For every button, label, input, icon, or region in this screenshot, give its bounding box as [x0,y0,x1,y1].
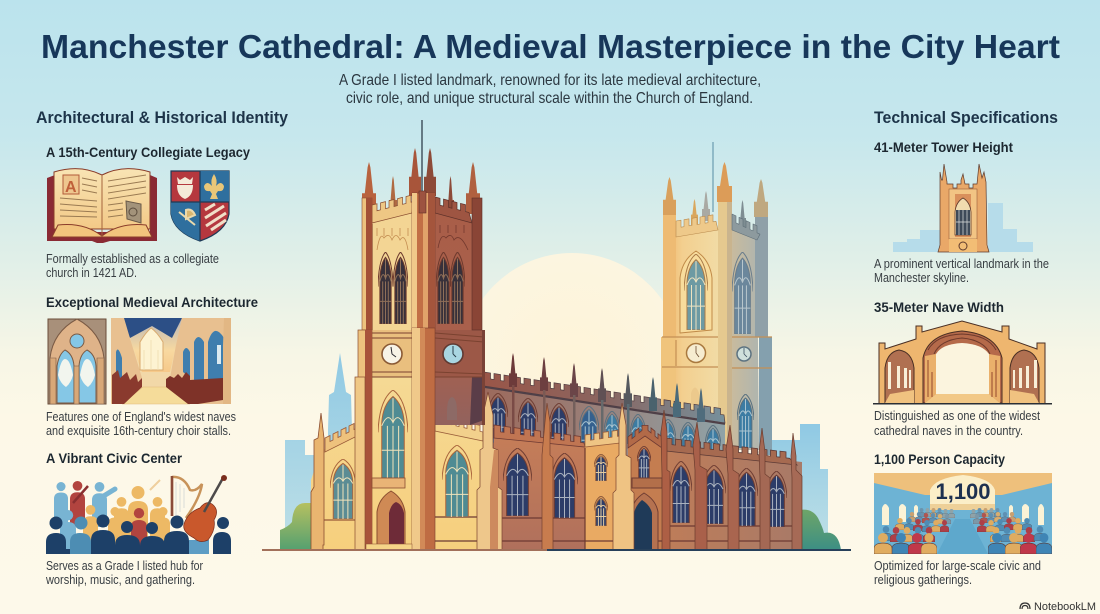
heading: 41-Meter Tower Height [874,139,1013,155]
choir stalls [112,370,142,404]
tree left [280,503,316,550]
stripes [205,204,226,230]
title: Manchester Cathedral: A Medieval Masterpiece in the City Heart [41,28,1060,65]
subtitle: A Grade I listed landmark, renowned for its late medieval architecture, [339,72,761,89]
panel: medieval architecture [46,294,258,438]
violin [184,503,217,542]
panel: collegiate legacy [46,144,250,280]
tree right [800,510,841,550]
heading: A Vibrant Civic Center [46,450,183,466]
caption: Optimized for large-scale civic and [874,559,1041,573]
aisle buttresses [477,392,502,550]
crown [177,177,193,199]
porch door [631,493,658,550]
right tower clock side [737,347,751,361]
belfry window left [378,252,393,324]
ground line [262,549,851,551]
right section heading: Technical Specifications [874,109,1058,127]
caption: church in 1421 AD. [46,266,137,280]
city skyline right [772,424,828,545]
city skyline left [285,353,352,550]
subtitle [339,72,761,107]
heading: 1,100 Person Capacity [874,451,1005,467]
icon: coat of arms shield [171,171,229,241]
icon: gothic window tracery [48,319,106,404]
crowd right [970,508,1052,554]
caption [874,257,1049,285]
side aisle left [885,350,914,403]
porch inscription [632,478,662,488]
caption: worship, music, and gathering. [45,573,195,587]
caption: Manchester skyline. [874,271,969,285]
belfry window right [436,252,451,324]
main tower [355,120,485,550]
tower blind arcade [377,228,408,250]
caption: and exquisite 16th-century choir stalls. [46,424,231,438]
heading: Exceptional Medieval Architecture [46,294,258,310]
fleur de lis [204,174,224,199]
caption: religious gatherings. [874,573,972,587]
right tower mast [712,142,714,212]
crowd left [874,508,955,554]
right tower parapets [676,215,718,237]
heading: A 15th-Century Collegiate Legacy [46,144,250,160]
watermark: NotebookLM: NotebookLM [1034,601,1096,613]
illustration: Manchester Cathedral [262,120,851,551]
left section heading: Architectural & Historical Identity [36,109,289,127]
right tower clock front [686,344,706,362]
tower parapets [372,195,413,223]
lit windows [882,504,1044,525]
caption: cathedral naves in the country. [874,424,1023,438]
icon: capacity hall [874,473,1052,554]
aisle windows [442,445,472,517]
audience front row [46,514,231,554]
icon: nave interior with choir stalls [111,318,231,404]
hat and staff [179,210,195,225]
inscription band [372,478,405,488]
tower pinnacles [362,162,376,214]
seal [126,201,141,223]
caption: A prominent vertical landmark in the [874,257,1049,271]
caption [46,252,219,280]
front aisle wall and porch [430,392,802,550]
left aisle buttress [311,413,324,550]
caption: Serves as a Grade I listed hub for [46,559,203,573]
caption [874,409,1040,438]
harp [172,476,202,518]
aisle parapets [435,415,483,441]
panel: nave width [873,299,1052,438]
caption: Features one of England's widest naves [46,410,236,424]
tower main window [378,390,408,478]
clerestory parapet [484,372,725,423]
tower clock front [382,344,402,364]
caption [874,559,1041,587]
buttresses upper [362,198,372,330]
icon: open book [47,169,157,243]
caption [46,410,236,438]
right tower side window [732,252,753,334]
subtitle: civic role, and unique structural scale within the Church of England. [346,90,753,107]
panel: tower height [874,139,1049,285]
left aisle [311,413,357,550]
right tower blind arch [691,388,699,405]
sun disc [462,253,682,473]
side aisle right [1010,350,1039,403]
tower clock side [443,344,463,364]
icon: crowd with harp and violin [46,475,231,558]
caption: Formally established as a collegiate [46,252,219,266]
capacity number: 1,100 [935,479,991,504]
icon: cross-section of nave [873,321,1052,404]
panel: civic center [45,450,231,587]
tower mast [421,120,423,194]
tower faces [372,212,412,330]
caption [45,559,203,587]
panel: capacity [874,451,1052,587]
floor [122,387,190,404]
clock stage [358,333,484,377]
caption: Distinguished as one of the widest [874,409,1040,423]
right tower [661,142,772,455]
tower door [377,491,405,547]
icon: open book: A [65,179,77,196]
heading: 35-Meter Nave Width [874,299,1004,315]
icon: tower [938,164,989,252]
nave clerestory [484,353,725,475]
icon: skyline [893,203,1033,252]
illuminated letter [63,175,79,194]
right tower front window [680,251,712,333]
